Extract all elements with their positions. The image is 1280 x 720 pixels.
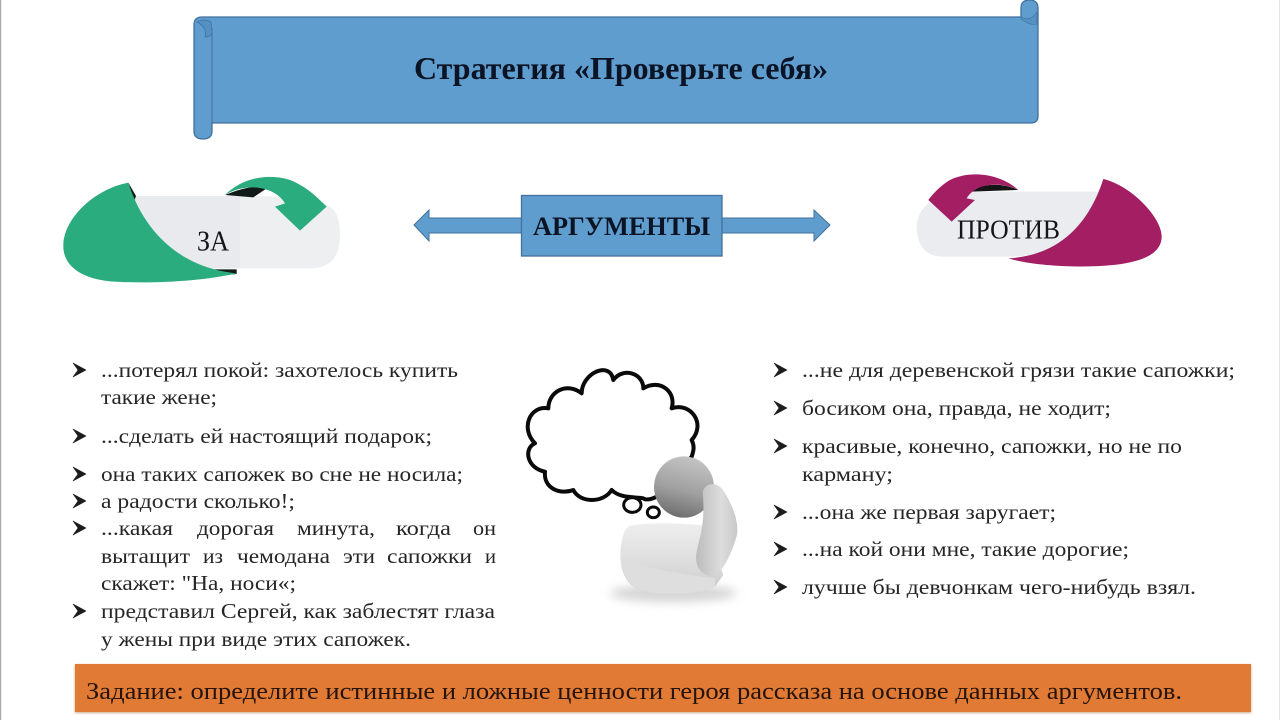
list: arguments against: [774, 358, 1235, 599]
list: arguments for: вытащит: [101, 544, 191, 568]
list: arguments against: босиком она, правда, не ходит;: [802, 396, 1111, 420]
magenta blob: [1008, 179, 1162, 266]
badge: за: [63, 177, 340, 282]
illustration: thinking figure with thought bubble: [528, 370, 737, 602]
list: arguments against: ...не для деревенской грязи такие сапожки;: [802, 358, 1235, 382]
list: arguments for: такие жене;: [101, 385, 217, 409]
task text: Задание: определите истинные и ложные ценности героя рассказа на основе данных аргументов.: [86, 679, 1182, 705]
list: arguments for: сапожки: [387, 544, 472, 568]
label: за: ЗА: [197, 227, 229, 258]
list: arguments for: у жены при виде этих сапожек.: [101, 627, 411, 651]
list: arguments against: ...она же первая заругает;: [802, 500, 1056, 524]
thought bubble: [528, 370, 697, 500]
list: arguments for: а радости сколько!;: [101, 489, 295, 513]
list: arguments for: эти: [343, 544, 375, 568]
double arrow with label box: [414, 196, 830, 256]
list: arguments for: ...какая: [101, 516, 173, 540]
list: arguments for: чемодана: [237, 544, 330, 568]
green blob: [63, 183, 237, 282]
list: arguments for: дорогая: [197, 516, 274, 540]
title: Стратегия «Проверьте себя»: [414, 51, 828, 86]
list: arguments for: когда: [396, 516, 452, 540]
list: arguments for: представил Сергей, как заблестят глаза: [101, 599, 495, 623]
task bar: [75, 664, 1251, 712]
list: arguments for: минута,: [297, 516, 375, 540]
title banner scroll: [194, 0, 1038, 139]
list: arguments for: он: [473, 516, 496, 540]
list: arguments for: ...потерял покой: захотелось купить: [101, 358, 458, 382]
torso: [620, 523, 723, 594]
badge: против: [917, 174, 1162, 266]
magenta arrow: [928, 174, 1018, 222]
list: arguments against: ...на кой они мне, такие дорогие;: [802, 537, 1129, 561]
label: аргументы: АРГУМЕНТЫ: [533, 211, 710, 241]
head: [654, 456, 714, 518]
list: arguments for: и: [485, 544, 496, 568]
list: arguments for: ...сделать ей настоящий подарок;: [101, 424, 432, 448]
list: arguments against: карману;: [802, 462, 893, 486]
ground shadow: [610, 585, 737, 602]
list: arguments for: [73, 358, 496, 651]
bubble trail: [624, 498, 659, 518]
green arrow: [225, 177, 327, 231]
list: arguments against: красивые, конечно, сапожки, но не по: [802, 434, 1182, 458]
raised arm: [696, 484, 737, 576]
list: arguments for: скажет: "На, носи«;: [101, 571, 296, 595]
label: против: ПРОТИВ: [957, 215, 1060, 245]
list: arguments for: она таких сапожек во сне не носила;: [101, 462, 463, 486]
list: arguments for: из: [203, 544, 223, 568]
list: arguments against: лучше бы девчонкам чего-нибудь взял.: [802, 575, 1196, 599]
